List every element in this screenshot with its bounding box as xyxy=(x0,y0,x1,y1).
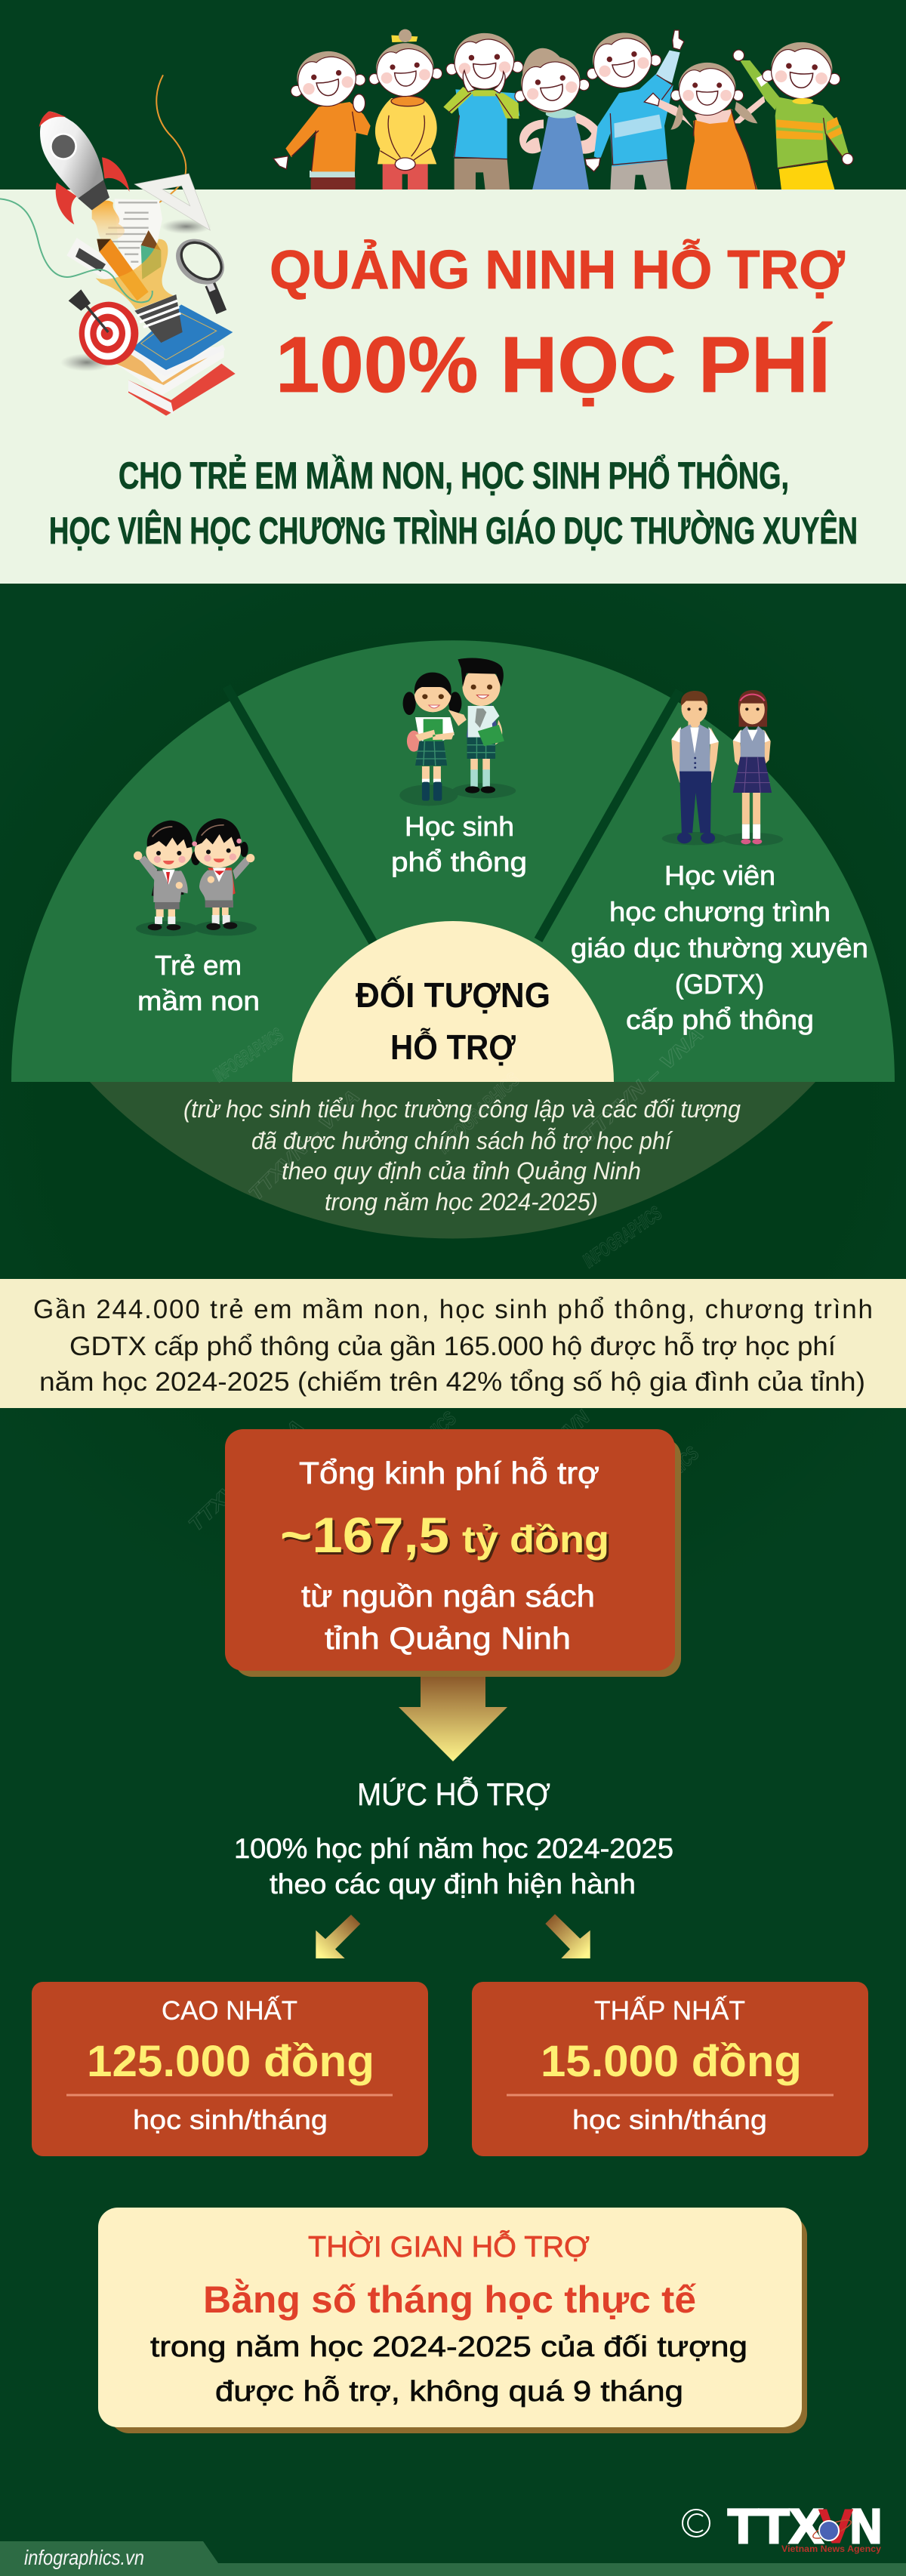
figure: 167,5 ty dong: tỷ đồng xyxy=(464,1521,612,1563)
panel: lowest xyxy=(472,1982,868,2156)
arrow: down left xyxy=(316,1915,360,1958)
watermark: agency marks: INFOGRAPHICS xyxy=(578,1201,666,1272)
lower segment: exclusions xyxy=(90,1082,815,1239)
note: exclusions: (trừ học sinh tiểu học trường công lập và các đối tượng xyxy=(183,1095,741,1123)
icon: light bulb xyxy=(96,239,183,343)
icon: rocket xyxy=(39,111,130,224)
green dome xyxy=(11,640,895,1082)
label: continuing education students: học chương trình xyxy=(609,896,830,927)
icon: globe xyxy=(811,2516,853,2542)
label: continuing education students: Học viên xyxy=(664,860,775,891)
arrow: down xyxy=(399,1677,507,1761)
tagline: Vietnam News Agency xyxy=(781,2544,881,2554)
watermark: agency marks: TTXVN xyxy=(535,1405,595,1464)
subtitle xyxy=(49,454,858,552)
text: beneficiaries: năm học 2024-2025 (chiếm trên 42% tổng số hộ gia đình của tỉnh) xyxy=(39,1367,865,1397)
decorative curve: orange xyxy=(136,75,186,257)
chart: target groups semicircle xyxy=(11,640,895,1239)
label: school pupils: Học sinh xyxy=(405,811,514,842)
figure: 167,5 ty dong xyxy=(280,1507,612,1565)
text: beneficiaries: GDTX cấp phổ thông của gần 165.000 hộ được hỗ trợ học phí xyxy=(69,1332,836,1361)
note: exclusions xyxy=(183,1095,741,1216)
panel: support duration xyxy=(98,2208,807,2433)
illustration: school pupils xyxy=(399,658,516,806)
text: budget source: từ nguồn ngân sách xyxy=(301,1579,595,1613)
label: continuing education students: cấp phổ thông xyxy=(626,1004,814,1035)
icon: pencils xyxy=(97,230,161,300)
heading: doi tuong ho tro: ĐỐI TƯỢNG xyxy=(356,975,550,1015)
label: continuing education students: giáo dục thường xuyên xyxy=(571,932,868,963)
illustration: group of children xyxy=(273,26,853,190)
icon: copyright xyxy=(683,2510,710,2537)
watermark: agency marks: TTXVN – VNA xyxy=(183,1415,308,1536)
child 4 blue dress xyxy=(509,44,604,190)
label: preschool xyxy=(137,950,260,1016)
cream centre dome xyxy=(292,921,614,1082)
watermark: agency marks: INFOGRAPHICS xyxy=(614,1442,704,1529)
label: continuing education students: (GDTX) xyxy=(675,969,764,1000)
icon: book stack xyxy=(116,304,236,416)
title: Quang Ninh ho tro 100% hoc phi: QUẢNG NINH HỖ TRỢ xyxy=(270,239,846,300)
text: budget source: tỉnh Quảng Ninh xyxy=(325,1621,571,1656)
heading: doi tuong ho tro: HỖ TRỢ xyxy=(390,1028,516,1067)
illustration: preschool pupils xyxy=(134,818,257,936)
panel: highest xyxy=(32,1982,428,2156)
icon: flame of rocket xyxy=(92,201,125,242)
text: support level: 100% học phí năm học 2024-2025 xyxy=(234,1833,673,1864)
text: beneficiaries xyxy=(33,1295,873,1397)
label: cao nhat: CAO NHẤT xyxy=(162,1995,297,2026)
logo: TTXVN xyxy=(728,2499,882,2554)
footer strip xyxy=(0,2541,906,2576)
icon: ruler xyxy=(66,238,121,283)
watermark: agency marks: INFOGRAPHICS xyxy=(432,1068,524,1157)
child 6 orange dress with braids xyxy=(644,63,779,190)
footer url: infographics.vn xyxy=(24,2546,144,2569)
text: support level: theo các quy định hiện hành xyxy=(270,1869,636,1900)
text: duration detail xyxy=(150,2331,747,2408)
unit: học sinh/tháng xyxy=(133,2104,328,2135)
note: exclusions: đã được hưởng chính sách hỗ trợ học phí xyxy=(251,1127,673,1154)
child 2 yellow blouse xyxy=(366,29,444,190)
logo: TTXVN: N xyxy=(850,2499,882,2553)
label: school pupils xyxy=(391,811,527,877)
logo: TTXVN: TTX xyxy=(728,2499,823,2553)
child 5 striped blue shirt, pointing up xyxy=(580,26,684,190)
figure: 15.000 dong: 15.000 đồng xyxy=(541,2037,802,2086)
text: duration detail: trong năm học 2024-2025 của đối tượng xyxy=(150,2331,747,2363)
text: funding label: Tổng kinh phí hỗ trợ xyxy=(299,1456,599,1490)
unit: học sinh/tháng xyxy=(572,2104,767,2135)
figure: 167,5 ty dong: tỷ đồng xyxy=(462,1518,609,1561)
illustration: continuing education students xyxy=(662,690,783,846)
highlight: bang so thang hoc thuc te: Bằng số tháng học thực tế xyxy=(203,2279,696,2321)
decorative curve: green xyxy=(0,199,153,303)
figure: 167,5 ty dong: ~167,5 xyxy=(280,1507,449,1563)
title: Quang Ninh ho tro 100% hoc phi xyxy=(270,239,846,409)
figure: 125.000 dong: 125.000 đồng xyxy=(87,2037,374,2086)
note: exclusions: trong năm học 2024-2025) xyxy=(325,1188,598,1216)
heading: doi tuong ho tro xyxy=(356,975,550,1067)
child 3 blue shirt, green sleeves xyxy=(443,32,524,190)
info band xyxy=(0,1279,906,1408)
panel: total funding xyxy=(225,1429,681,1677)
watermark: agency marks: TTXVN – VNA xyxy=(244,1085,364,1205)
watermark: agency marks: INFOGRAPHICS xyxy=(209,1023,288,1086)
shaded halo behind the dome xyxy=(0,508,906,1656)
label: preschool: Trẻ em xyxy=(155,950,242,981)
text: budget source xyxy=(301,1579,595,1656)
watermark: agency marks xyxy=(183,1022,708,1536)
arrow: down right xyxy=(545,1914,590,1958)
note: exclusions: theo quy định của tỉnh Quảng Ninh xyxy=(282,1157,641,1185)
figure: 167,5 ty dong: ~167,5 xyxy=(282,1509,451,1565)
icon: target with arrow xyxy=(60,289,138,371)
watermark: agency marks: TTXVN – VNA xyxy=(577,1022,708,1147)
logo: TTXVN: V xyxy=(818,2499,853,2553)
child 1 orange sweater xyxy=(273,45,371,190)
label: thap nhat: THẤP NHẤT xyxy=(594,1995,745,2026)
child 7 green sweater with stripes xyxy=(733,40,853,190)
watermark: agency marks: INFOGRAPHICS xyxy=(368,1407,461,1496)
text: beneficiaries: Gần 244.000 trẻ em mầm non, học sinh phổ thông, chương trình xyxy=(33,1295,873,1324)
icon: magnifier xyxy=(171,234,229,312)
text: duration detail: được hỗ trợ, không quá 9 tháng xyxy=(215,2375,683,2408)
icon: paper sheet xyxy=(106,199,162,272)
title: Quang Ninh ho tro 100% hoc phi: 100% HỌC PHÍ xyxy=(276,321,833,409)
label: school pupils: phổ thông xyxy=(391,846,527,877)
panel: title background xyxy=(0,190,906,584)
heading: muc ho tro: MỨC HỖ TRỢ xyxy=(357,1776,550,1812)
label: preschool: mầm non xyxy=(137,985,260,1016)
heading: thoi gian ho tro: THỜI GIAN HỖ TRỢ xyxy=(308,2229,590,2263)
illustration: rocket, books, target and school items xyxy=(0,75,236,416)
text: support level xyxy=(234,1833,673,1900)
label: continuing education students xyxy=(571,860,868,1035)
icon: set square xyxy=(134,174,211,234)
